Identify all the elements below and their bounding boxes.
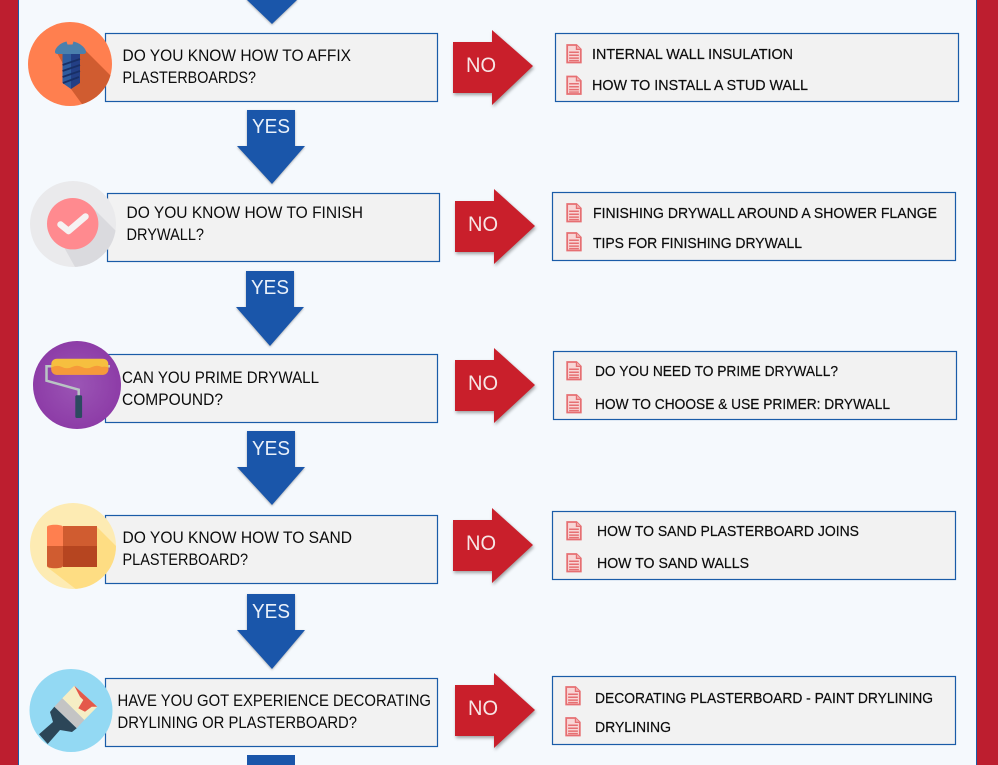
- icon: check mark: [30, 181, 116, 267]
- right blue rule: [976, 0, 977, 765]
- arrow: no 4: [453, 508, 533, 583]
- resources box 1: INTERNAL WALL INSULATION: [592, 46, 793, 63]
- step 5: decorating experience: [30, 669, 956, 752]
- resources box 4: HOW TO SAND WALLS: [597, 555, 749, 572]
- resources box 3: HOW TO CHOOSE & USE PRIMER: DRYWALL: [595, 396, 890, 413]
- arrow: yes 1: [237, 110, 305, 184]
- arrow: no 1: [453, 30, 533, 105]
- resources box 5: [552, 676, 956, 744]
- question box 1: [106, 34, 438, 102]
- question box 2: DRYWALL?: [126, 226, 204, 244]
- step 4: sand plasterboard: [30, 503, 956, 589]
- arrow: yes 3: YES: [252, 438, 290, 460]
- arrow: no 2: [455, 189, 535, 264]
- icon: screw: [28, 22, 112, 106]
- question box 5: HAVE YOU GOT EXPERIENCE DECORATING: [118, 692, 431, 710]
- step 1: affix plasterboards: [28, 22, 958, 115]
- resources box 1: HOW TO INSTALL A STUD WALL: [592, 77, 808, 94]
- arrow: no 5: NO: [468, 697, 498, 720]
- left red border: [0, 0, 18, 765]
- question box 1: DO YOU KNOW HOW TO AFFIX: [122, 47, 351, 65]
- arrow: no 5: [455, 673, 535, 748]
- arrow: no 3: [455, 348, 535, 423]
- resources box 4: HOW TO SAND PLASTERBOARD JOINS: [597, 523, 859, 540]
- arrow: yes 2: YES: [251, 277, 289, 299]
- question box 4: [106, 516, 438, 584]
- question box 5: [106, 678, 438, 746]
- left blue rule: [18, 0, 19, 765]
- icon: plasterboard roll: [30, 503, 116, 589]
- arrow: no 3: NO: [468, 372, 498, 395]
- step 2: finish drywall: [30, 181, 956, 267]
- resources box 5: DRYLINING: [595, 719, 671, 736]
- question box 2: DO YOU KNOW HOW TO FINISH: [126, 204, 363, 222]
- question box 4: DO YOU KNOW HOW TO SAND: [122, 529, 352, 547]
- arrow: yes 4: YES: [252, 601, 290, 623]
- question box 5: DRYLINING OR PLASTERBOARD?: [118, 714, 357, 732]
- question box 4: PLASTERBOARD?: [122, 551, 248, 569]
- arrow: no 2: NO: [468, 213, 498, 236]
- resources box 1: [556, 34, 958, 102]
- resources box 5: DECORATING PLASTERBOARD - PAINT DRYLINING: [595, 690, 933, 707]
- icon: paint brush: [30, 669, 112, 752]
- resources box 3: [554, 352, 956, 420]
- resources box 2: [552, 192, 956, 260]
- resources box 2: FINISHING DRYWALL AROUND A SHOWER FLANGE: [593, 205, 937, 222]
- step 3: prime compound: [33, 341, 956, 429]
- icon: paint roller: [33, 341, 121, 429]
- arrow: yes 1: YES: [252, 116, 290, 138]
- question box 3: COMPOUND?: [122, 391, 223, 409]
- question box 2: [108, 194, 440, 262]
- resources box 4: [552, 512, 956, 580]
- arrow: no 1: NO: [466, 54, 496, 77]
- arrow: no 4: NO: [466, 532, 496, 555]
- resources box 3: DO YOU NEED TO PRIME DRYWALL?: [595, 363, 838, 380]
- arrow: yes 4: [237, 594, 305, 669]
- arrow: yes 2: [236, 271, 304, 346]
- arrow: outgoing yes stub: [247, 755, 295, 765]
- question box 3: CAN YOU PRIME DRYWALL: [122, 369, 319, 387]
- right red border: [977, 0, 998, 765]
- resources box 2: TIPS FOR FINISHING DRYWALL: [593, 235, 802, 252]
- question box 3: [106, 354, 438, 422]
- question box 1: PLASTERBOARDS?: [122, 69, 256, 87]
- arrow: incoming from above: [247, 0, 297, 24]
- arrow: yes 3: [237, 431, 305, 505]
